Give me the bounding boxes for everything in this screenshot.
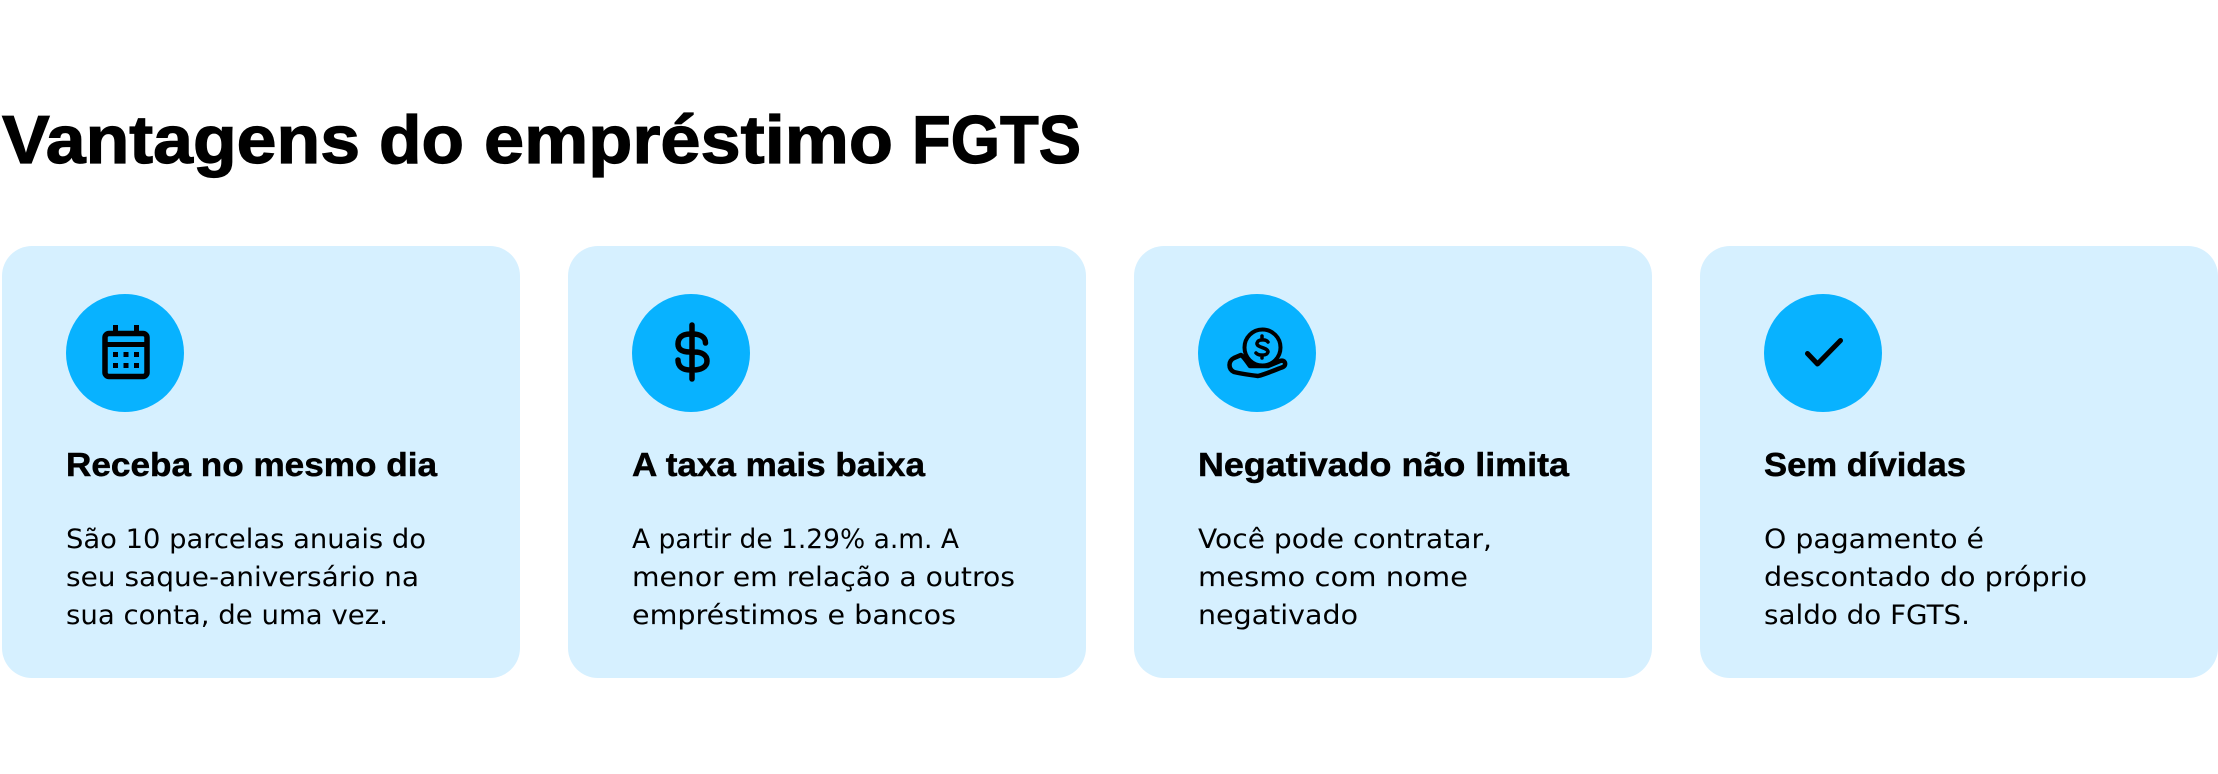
text block: sua conta, de uma vez. [66,600,388,631]
text block: A partir de 1.29% a.m. A [632,524,960,555]
text block: São 10 parcelas anuais do [66,524,426,555]
heading: Sem dívidas [1764,446,1966,483]
text block [1198,524,1492,631]
text block [66,524,426,631]
text block: O pagamento é [1764,524,1984,555]
text block: mesmo com nome [1198,562,1468,593]
icon: calendar [66,294,184,412]
title [2,102,1081,178]
panel: Receba no mesmo dia [2,246,520,678]
text block: empréstimos e bancos [632,600,956,631]
text block: Você pode contratar, [1198,524,1492,555]
icon: dollar sign [632,294,750,412]
icon: check mark [1764,294,1882,412]
text block: menor em relação a outros [632,562,1015,593]
panel: Sem dívidas [1700,246,2218,678]
title: FGTS [912,102,1081,178]
text block: negativado [1198,600,1358,631]
heading: Negativado não limita [1198,446,1570,483]
heading: A taxa mais baixa [632,446,926,483]
title: empréstimo [484,102,893,178]
text block: saldo do FGTS. [1764,600,1970,631]
title: Vantagens [2,102,360,178]
text block [632,524,1015,631]
title: do [379,102,464,178]
text block: seu saque-aniversário na [66,562,419,593]
text block: descontado do próprio [1764,562,2087,593]
icon: hand holding coin [1198,294,1316,412]
panel: A taxa mais baixa [568,246,1086,678]
panel: Negativado não limita [1134,246,1652,678]
heading: Receba no mesmo dia [66,446,438,483]
text block [1764,524,2087,631]
